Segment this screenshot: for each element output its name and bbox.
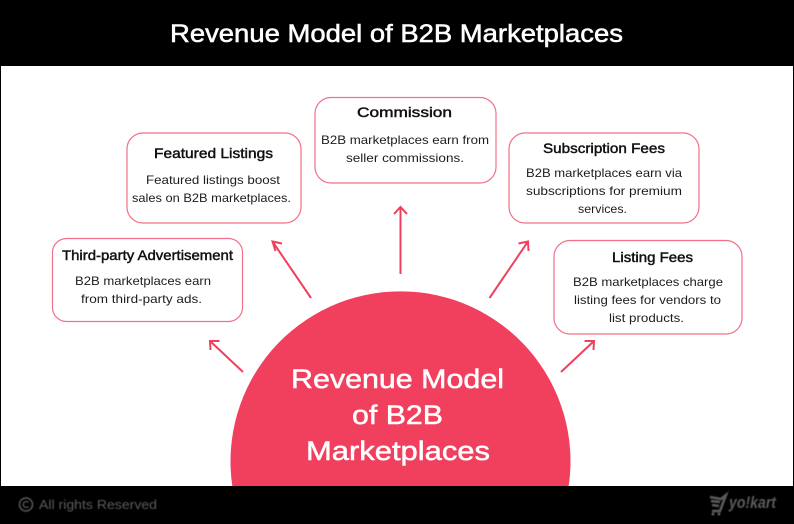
panel: listing fees: B2B marketplaces charge [573, 275, 723, 289]
panel: subscription fees: Subscription Fees [543, 140, 665, 156]
central semicircle with heading: Marketplaces [306, 436, 490, 466]
panel: listing fees [554, 240, 742, 334]
panel: commission [315, 98, 496, 183]
panel: subscription fees: subscriptions for premium [526, 184, 682, 198]
panel: third-party advertisement [52, 238, 242, 322]
central semicircle with heading: Revenue Model [291, 364, 504, 394]
panel: featured listings: Featured Listings [154, 145, 273, 161]
footer logo: yolkart: yo!kart [728, 493, 777, 512]
panel: featured listings: sales on B2B marketplaces. [132, 191, 291, 205]
panel: third-party advertisement: B2B marketplaces earn [75, 274, 211, 288]
panel: featured listings: Featured listings boost [146, 173, 281, 187]
central semicircle with heading: of B2B [352, 400, 443, 430]
arrow: to third-party advertisement [210, 341, 243, 372]
panel: third-party advertisement: Third-party Advertisement [62, 247, 233, 263]
panel: commission: B2B marketplaces earn from [321, 133, 489, 147]
panel: commission: seller commissions. [346, 151, 464, 165]
panel: third-party advertisement: from third-party ads. [81, 292, 202, 306]
panel: subscription fees: B2B marketplaces earn via [526, 166, 682, 180]
footer logo: yolkart [710, 493, 777, 516]
arrow: to commission [394, 207, 407, 274]
title: Revenue Model of B2B Marketplaces [170, 20, 623, 48]
central semicircle with heading [230, 291, 570, 486]
panel: listing fees: listing fees for vendors to [574, 293, 721, 307]
panel: subscription fees [509, 133, 699, 223]
arrow: to listing fees [561, 341, 594, 372]
arrow: to featured listings [272, 242, 311, 298]
panel: subscription fees: services. [578, 202, 627, 216]
panel: listing fees: Listing Fees [612, 249, 693, 265]
panel: listing fees: list products. [609, 311, 684, 325]
panel: featured listings [127, 133, 301, 223]
arrow: to subscription fees [490, 242, 528, 298]
panel: commission: Commission [357, 104, 452, 120]
footer copyright: All rights Reserved [39, 497, 157, 512]
